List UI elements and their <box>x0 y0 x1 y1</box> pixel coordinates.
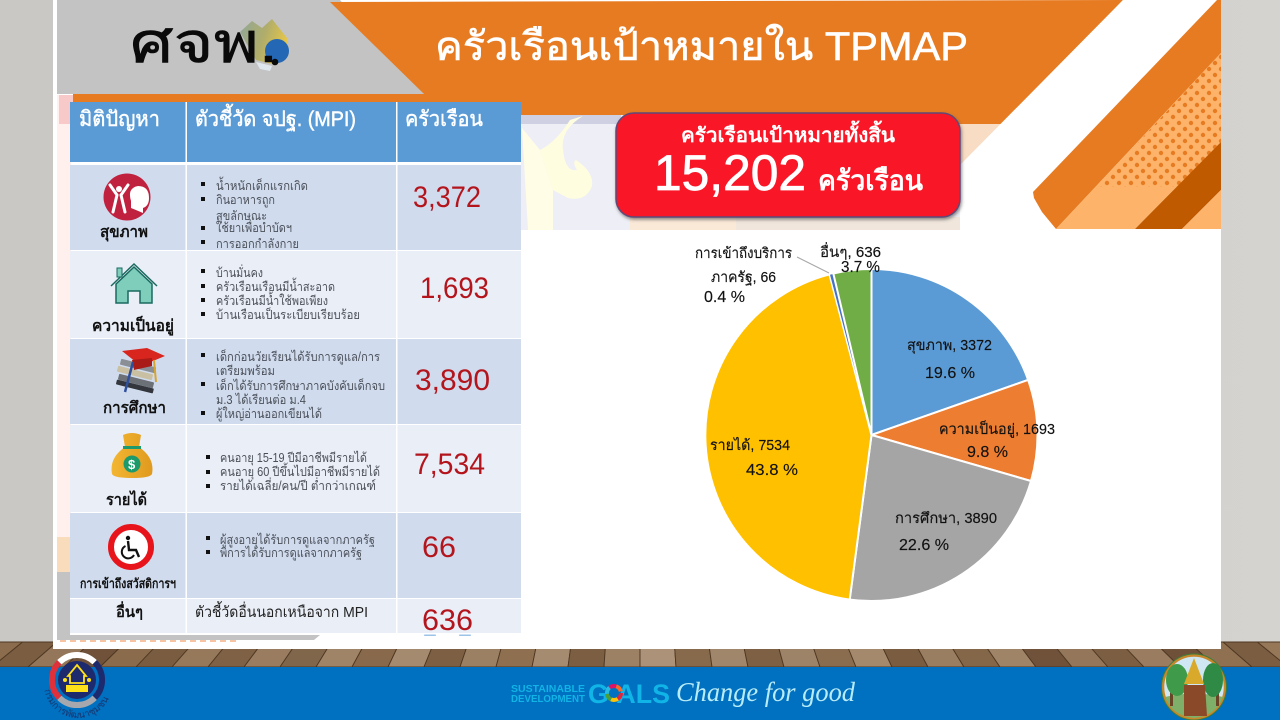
row: income: คนอายุ 60 ปีขึ้นไปมีอาชีพมีรายได้ <box>220 462 380 480</box>
table header row: ตัวชี้วัด จปฐ. (MPI) <box>195 104 356 131</box>
pie labels <box>695 242 1055 554</box>
footer: sustainable development goals: Change for good <box>676 677 855 707</box>
slice: income <box>705 274 872 600</box>
footer: sustainable development goals: DEVELOPMENT <box>511 693 586 705</box>
pie labels: 3.7 % <box>841 259 880 276</box>
slice: other <box>833 269 872 435</box>
pie labels: 43.8 % <box>746 462 798 479</box>
pie labels: ภาครัฐ, 66 <box>711 270 776 286</box>
pie labels: 0.4 % <box>704 289 745 306</box>
pie labels: 9.8 % <box>967 444 1008 461</box>
callout: total households: 15,202 <box>654 145 806 201</box>
row: health: ใช้ยาเพื่อบำบัดฯ <box>216 219 292 235</box>
row: welfare access: ผู้สูงอายุได้รับการดูแลจากภาครัฐ <box>220 533 375 548</box>
row: education: ผู้ใหญ่อ่านออกเขียนได้ <box>216 407 322 422</box>
right orange shapes <box>1033 0 1221 229</box>
pie labels: ความเป็นอยู่, 1693 <box>939 419 1055 438</box>
orange header banner <box>73 0 1123 124</box>
row: education <box>103 348 490 422</box>
row: housing: บ้านเรือนเป็นระเบียบเรียบร้อย <box>216 307 360 322</box>
row: housing: บ้านมั่นคง <box>216 264 263 280</box>
pie labels: 22.6 % <box>899 537 949 554</box>
pie labels: สุขภาพ, 3372 <box>907 338 992 354</box>
icon: wheelchair sign <box>111 527 151 567</box>
row: housing: 1,693 <box>420 272 489 305</box>
table <box>70 102 521 637</box>
row: health: การออกกำลังกาย <box>216 237 299 251</box>
pie labels: รายได้, 7534 <box>710 436 790 454</box>
row: health: กินอาหารถูก <box>216 193 275 208</box>
white diagonal stripe <box>960 0 1217 230</box>
table header row: มิติปัญหา <box>79 108 160 131</box>
header grey band <box>57 0 424 94</box>
footer band <box>0 667 1280 720</box>
row: education: การศึกษา <box>103 399 166 417</box>
row: welfare access <box>80 527 456 591</box>
footer: sustainable development goals <box>511 677 855 709</box>
row: education: เด็กได้รับการศึกษาภาคบังคับเด็กจบ <box>216 378 385 393</box>
table header row <box>70 102 521 162</box>
slice: health <box>872 269 1028 435</box>
table row backgrounds <box>70 165 521 633</box>
row: education: ม.3 ได้เรียนต่อ ม.4 <box>216 393 306 407</box>
wood floor <box>0 642 1280 668</box>
callout: total households: ครัวเรือน <box>818 165 923 196</box>
row: education: 3,890 <box>415 364 490 397</box>
slice: housing <box>872 380 1038 481</box>
row: housing: ครัวเรือนเรือนมีน้ำสะอาด <box>216 277 335 294</box>
row: housing <box>92 264 489 337</box>
pie labels: การศึกษา, 3890 <box>895 511 997 527</box>
row: income <box>106 433 485 509</box>
row: welfare access: 66 <box>422 531 456 564</box>
logo text: ศจพ. <box>130 11 278 74</box>
leader line <box>797 257 829 273</box>
pie chart <box>695 242 1055 601</box>
pale middle background <box>521 115 1011 230</box>
pie labels: การเข้าถึงบริการ <box>695 245 792 262</box>
row: other <box>116 601 473 637</box>
icon: books and cap <box>116 348 165 394</box>
row: health: น้ำหนักเด็กแรกเกิด <box>216 176 308 193</box>
icon: sdg wheel <box>607 686 621 700</box>
row: health <box>100 174 481 251</box>
row: other: ตัวชี้วัดอื่นนอกเหนือจาก MPI <box>195 601 368 621</box>
callout: total households <box>616 113 960 217</box>
row: education: เด็กก่อนวัยเรียนได้รับการดูแล/การ <box>216 349 380 365</box>
callout: total households: ครัวเรือนเป้าหมายทั้งสิ้น <box>681 120 895 147</box>
row: education: เตรียมพร้อม <box>216 364 275 378</box>
row: other: 636 <box>422 604 473 637</box>
pie labels: อื่นๆ, 636 <box>820 242 881 261</box>
row: income: รายได้ <box>106 490 147 509</box>
pie labels: 19.6 % <box>925 365 975 382</box>
icon: money bag <box>112 433 152 478</box>
slice: service access <box>829 274 872 435</box>
row: income: 7,534 <box>414 448 485 481</box>
row: health: สุขลักษณะ <box>216 209 267 224</box>
footer logo: provincial crest <box>1162 654 1226 720</box>
title: ครัวเรือนเป้าหมายใน TPMAP <box>435 23 968 69</box>
left edge pale tint <box>57 95 320 641</box>
footer logo: department seal <box>44 652 108 718</box>
icon: money bag: $ <box>128 457 136 472</box>
row: other: อื่นๆ <box>116 601 143 621</box>
row: health: 3,372 <box>413 181 481 214</box>
footer: sustainable development goals: SUSTAINABLE <box>511 683 585 695</box>
row: income: คนอายุ 15-19 ปีมีอาชีพมีรายได้ <box>220 451 367 466</box>
row: health: สุขภาพ <box>100 224 148 242</box>
footer: sustainable development goals: G ALS <box>588 679 670 709</box>
icon: house <box>111 264 157 303</box>
row: welfare access: การเข้าถึงสวัสดิการฯ <box>80 576 176 591</box>
table header row: ครัวเรือน <box>405 108 483 131</box>
row: income: รายได้เฉลี่ย/คน/ปี ต่ำกว่าเกณฑ์ <box>220 477 376 493</box>
row: housing: ครัวเรือนมีน้ำใช้พอเพียง <box>216 291 328 308</box>
icon: globe logo <box>240 19 289 71</box>
icon: health <box>104 174 150 220</box>
row: housing: ความเป็นอยู่ <box>92 314 174 337</box>
row: welfare access: พิการได้รับการดูแลจากภาครัฐ <box>220 546 362 561</box>
slice: education <box>850 435 1031 601</box>
